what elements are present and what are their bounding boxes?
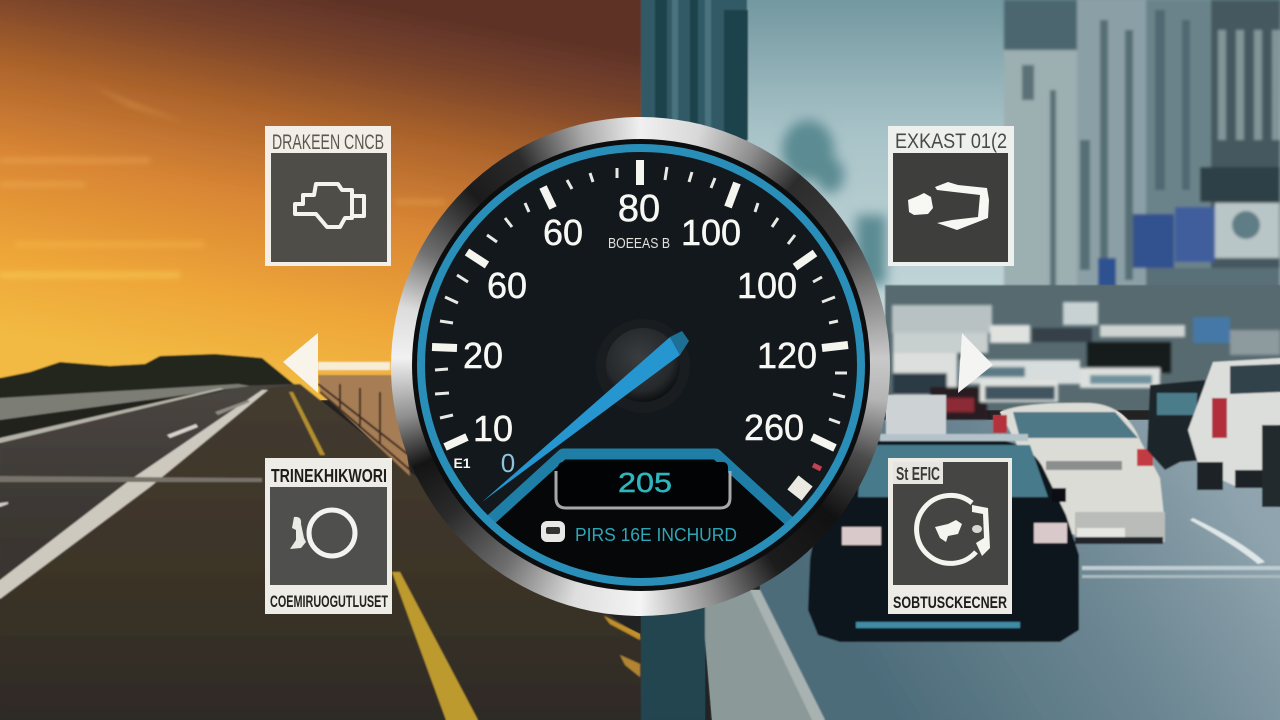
tree smudges — [782, 120, 886, 285]
black car in foreground — [808, 434, 1079, 642]
red limit mark — [813, 465, 821, 469]
speed scale numbers: E1 — [453, 455, 471, 471]
icon: check engine — [295, 184, 364, 227]
card: top-right warning: EXKAST 01(2 — [895, 130, 1007, 153]
dark hatchback — [1147, 380, 1205, 470]
speedometer gauge — [412, 139, 870, 591]
white sedan — [993, 403, 1165, 544]
speed scale numbers — [453, 188, 817, 478]
digital readout panel: 205 — [618, 467, 672, 498]
speed scale numbers: 100 — [681, 212, 741, 253]
gauge metallic bezel — [391, 117, 890, 616]
digital readout panel — [488, 448, 792, 578]
street and sidewalk — [760, 420, 1280, 720]
white end marker — [787, 475, 813, 501]
speed scale numbers: 120 — [757, 335, 817, 376]
icon: circular arrow — [917, 495, 990, 563]
speed scale numbers: 100 — [737, 265, 797, 306]
speed scale numbers: 10 — [473, 408, 513, 449]
card: bottom-left brake warning: COEMIRUOGUTLUSET — [270, 592, 388, 611]
speed scale numbers: 260 — [744, 407, 804, 448]
card: bottom-left brake warning: TRINEKHIKWORI — [271, 466, 387, 486]
card: bottom-right warning: SOBTUSCKECNER — [893, 593, 1007, 612]
speed scale numbers: 80 — [618, 188, 660, 230]
speed scale numbers: 20 — [463, 335, 503, 376]
speed scale numbers: 60 — [543, 212, 583, 253]
speed scale numbers: BOEEAS B — [608, 235, 670, 252]
left building — [641, 0, 747, 330]
right buildings — [1004, 0, 1280, 308]
white SUV at right edge — [1188, 358, 1280, 507]
needle hub — [596, 319, 690, 413]
card: bottom-right warning: St EFIC — [896, 464, 940, 484]
left half: sunset highway — [0, 0, 645, 720]
needle — [482, 331, 689, 502]
digital readout panel: PIRS 16E INCHURD — [575, 525, 737, 545]
speed scale numbers: 60 — [487, 265, 527, 306]
card: top-left engine warning: DRAKEEN CNCB — [272, 131, 384, 154]
icon: ring gauge — [290, 510, 355, 556]
major tick marks — [432, 160, 848, 448]
minor tick marks — [435, 167, 847, 423]
speed scale numbers: 0 — [501, 448, 515, 478]
gauge dial face — [412, 139, 870, 591]
right half: congested city street — [641, 0, 1280, 720]
icon: exhaust bracket — [908, 182, 989, 230]
